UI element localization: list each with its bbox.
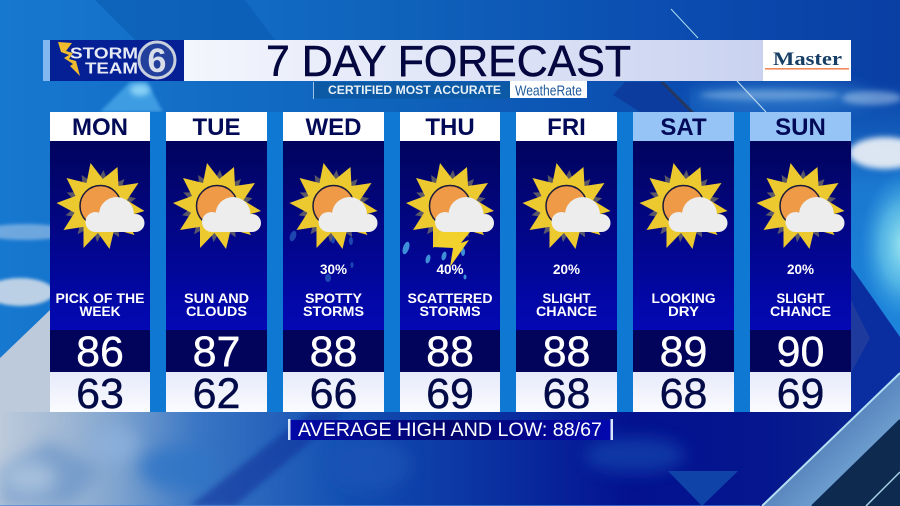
forecast column: Tuesday: CLOUDS xyxy=(186,304,247,319)
icon: lightning bolt xyxy=(433,232,470,267)
forecast column: Thursday xyxy=(400,112,500,418)
low temperature: 68 xyxy=(660,370,707,418)
icon: sun and cloud xyxy=(522,163,610,249)
high temperature: 86 xyxy=(76,328,124,376)
low temperature: 68 xyxy=(543,370,590,418)
forecast column: Wednesday xyxy=(283,112,384,418)
average high and low bar: AVERAGE HIGH AND LOW: 88/67 xyxy=(298,420,602,441)
header bar xyxy=(43,37,851,86)
corner diagonal stripes xyxy=(762,373,900,506)
day name: THU xyxy=(425,114,475,141)
day name: WED xyxy=(306,114,362,141)
logo: Storm Team 6: TEAM xyxy=(85,60,138,78)
forecast column: Thursday: STORMS xyxy=(420,304,480,319)
condition text: LOOKING xyxy=(652,291,716,306)
icon: rain drops xyxy=(401,228,466,280)
low temperature: 62 xyxy=(193,370,240,418)
high temperature: 89 xyxy=(660,328,707,376)
icon: sun and cloud xyxy=(290,163,378,249)
sponsor logo: Master xyxy=(763,40,851,81)
icon: rain drops xyxy=(288,230,354,282)
forecast column: Tuesday xyxy=(166,112,267,418)
condition text: SLIGHT xyxy=(542,291,591,306)
high temperature: 88 xyxy=(426,328,474,376)
low temperature: 69 xyxy=(777,370,824,418)
precipitation chance: 40% xyxy=(436,262,464,277)
high temperature: 87 xyxy=(193,328,240,376)
day name: FRI xyxy=(547,114,586,141)
day name: TUE xyxy=(192,114,240,141)
forecast column: Wednesday: STORMS xyxy=(303,304,364,319)
forecast column: Saturday xyxy=(633,112,734,418)
high temperature: 88 xyxy=(310,328,357,376)
condition text: SCATTERED xyxy=(408,291,493,306)
high temperature: 88 xyxy=(543,328,590,376)
low temperature: 69 xyxy=(426,370,474,418)
title banner: 7 DAY FORECAST xyxy=(266,37,631,86)
certification strip: WeatheRate xyxy=(515,82,582,100)
forecast column: Sunday: CHANCE xyxy=(770,304,831,319)
precipitation chance: 30% xyxy=(320,262,347,277)
icon: sun and cloud xyxy=(406,163,494,249)
sponsor logo: Master: Master xyxy=(773,49,843,70)
day name: SUN xyxy=(775,114,826,141)
title banner xyxy=(184,37,764,86)
forecast column: Saturday: DRY xyxy=(668,304,699,319)
low temperature: 63 xyxy=(76,370,124,418)
day name: MON xyxy=(72,114,128,141)
day name: SAT xyxy=(660,114,707,141)
precipitation chance: 20% xyxy=(787,262,814,277)
forecast column: Monday: WEEK xyxy=(80,304,121,319)
logo: Storm Team 6 xyxy=(43,40,184,81)
condition text: PICK OF THE xyxy=(56,291,144,306)
certification strip: CERTIFIED MOST ACCURATE xyxy=(328,85,501,97)
icon: sun and cloud xyxy=(640,163,728,249)
certification strip xyxy=(313,81,587,100)
icon: sun and cloud xyxy=(56,163,144,249)
logo: Storm Team 6: 6 xyxy=(148,42,166,80)
logo: Storm Team 6: STORM xyxy=(70,46,138,62)
forecast column: Sunday xyxy=(750,112,851,418)
high temperature: 90 xyxy=(777,328,824,376)
forecast column: Monday xyxy=(50,112,150,418)
condition text: SUN AND xyxy=(184,291,249,306)
low temperature: 66 xyxy=(310,370,357,418)
icon: sun and cloud xyxy=(756,163,844,249)
forecast column: Friday: CHANCE xyxy=(536,304,597,319)
column gutter strip xyxy=(150,112,750,412)
precipitation chance: 20% xyxy=(553,262,580,277)
condition text: SPOTTY xyxy=(305,291,362,306)
forecast column: Friday xyxy=(516,112,617,418)
condition text: SLIGHT xyxy=(776,291,825,306)
icon: sun and cloud xyxy=(173,163,261,249)
